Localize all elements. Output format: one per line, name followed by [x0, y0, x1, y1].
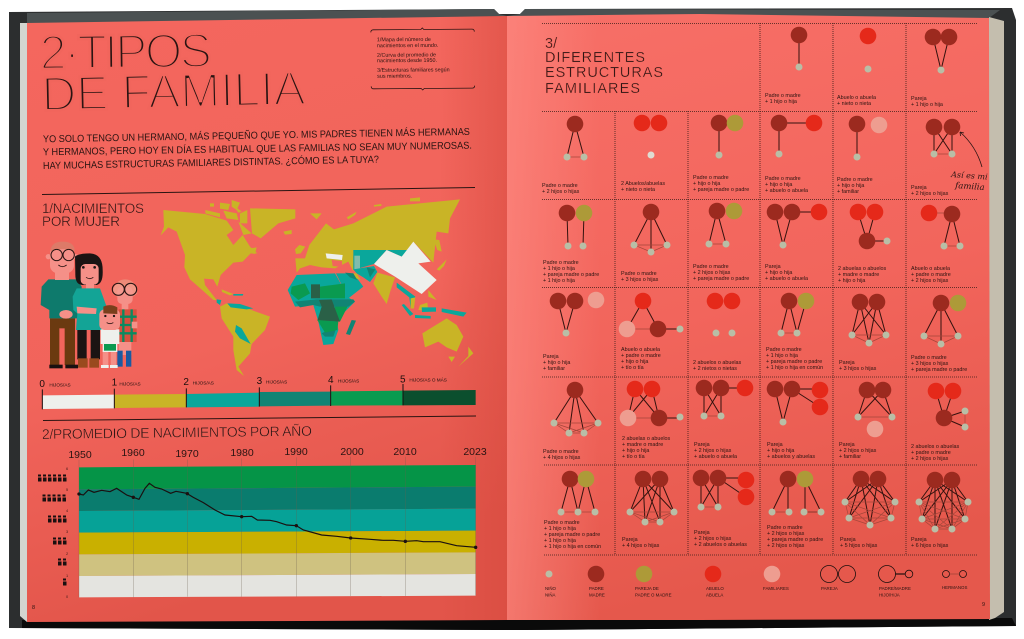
heading: promedio de nacimientos por ano: 2/PROMEDIO DE NACIMIENTOS POR AÑO [42, 423, 312, 442]
row 5 cell 6 [911, 472, 972, 549]
dotted grid [542, 23, 978, 555]
row 3 cell 5: Pareja [839, 360, 855, 366]
row 2 cell 3 [693, 203, 749, 282]
chart y axis with figures: 1 [66, 574, 68, 578]
row 2 cell 3: + 2 hijos o hijas [693, 270, 731, 276]
legend: family structure key: HERMANOS [942, 585, 967, 590]
madagascar [346, 320, 356, 335]
row 4 cell 2: 2 abuelas o abuelos [622, 436, 670, 442]
page number right: 9 [982, 602, 985, 608]
line chart [77, 457, 477, 597]
row 1 cell 2 [621, 115, 667, 193]
arabia [336, 273, 363, 298]
greenland [250, 208, 295, 238]
chart y axis with figures: 0 [66, 595, 68, 599]
contents box: 2/Curva del promedio de [377, 52, 436, 59]
world map [161, 197, 473, 376]
row 4 cell 2: + tío o tía [622, 454, 645, 460]
contents box: nacimientos en el mundo. [377, 43, 438, 49]
row 3 cell 4: Padre o madre [766, 347, 802, 353]
row 4 cell 2: + madre o madre [622, 442, 663, 448]
row 5 cell 2: + 4 hijos o hijas [622, 543, 660, 549]
row 3 cell 2: + hijo o hija [621, 359, 648, 365]
row 3 cell 5 [839, 294, 890, 372]
row 0 cell 5: Abuelo o abuela [837, 95, 876, 101]
chart y axis with figures: 3 [66, 530, 68, 534]
heading: diferentes estructuras familiares: DIFERENTES [545, 50, 645, 66]
illustration: family [41, 242, 137, 368]
row 4 cell 6: 2 abuelos o abuelas [911, 444, 959, 450]
chart y axis with figures: 2 [66, 552, 68, 556]
row 2 cell 3: Padre o madre [693, 264, 729, 270]
row 1 cell 4: + hijo o hija [765, 182, 792, 188]
legend: hijos per mujer: HIJOS/AS [338, 378, 359, 383]
row 3 cell 4: + 1 hijo o hija [766, 353, 798, 359]
row 5 cell 4 [767, 471, 824, 549]
legend: family structure key: PADRE/MADRE [879, 586, 911, 591]
heading: diferentes estructuras familiares [545, 36, 663, 97]
legend: family structure key: PAREJA [821, 586, 838, 591]
row 2 cell 1: Padre o madre [543, 260, 579, 266]
row 5 cell 1: + 1 hijo o hija en común [544, 544, 601, 550]
row 0 cell 6: Pareja [911, 96, 927, 102]
row 2 cell 5: + madre o madre [838, 272, 879, 278]
heading: diferentes estructuras familiares: ESTRUCTURAS [545, 65, 663, 81]
intro text: HAY MUCHAS ESTRUCTURAS FAMILIARES DISTINTAS. ¿CÓMO ES LA TUYA? [43, 153, 379, 172]
panel: left page [27, 16, 507, 622]
row 4 cell 4 [767, 381, 828, 460]
row 1 cell 1: + 2 hijos o hijas [542, 189, 580, 195]
row 2 cell 6: + padre o madre [911, 272, 951, 278]
legend: hijos per mujer: 0 [39, 379, 45, 390]
mother [73, 253, 106, 368]
india [373, 273, 395, 304]
heading: nacimientos por mujer: 1/NACIMIENTOS [42, 201, 144, 216]
row 5 cell 1: Padre o madre [544, 520, 580, 526]
row 3 cell 6 [911, 295, 967, 373]
row 5 cell 5: + 5 hijos o hijas [840, 543, 878, 549]
row 1 cell 1 [542, 116, 588, 195]
legend: family structure key: PADRE O MADRE [635, 592, 672, 598]
row 3 cell 3: + 2 nietos o nietas [693, 366, 737, 372]
row 5 cell 1: + 1 hijo o hija [544, 538, 576, 544]
legend: family structure key: ABUELA [706, 592, 723, 598]
boy [99, 305, 120, 368]
chart year labels: 2000 [340, 446, 364, 458]
row 0 cell 4 [765, 27, 807, 105]
row 5 cell 1: + pareja madre o padre [544, 532, 600, 538]
row 4 cell 5 [839, 382, 896, 460]
row 1 cell 5: + familiar [837, 189, 859, 195]
north america [161, 210, 257, 300]
row 5 cell 2 [622, 471, 678, 549]
row 2 cell 4: + abuelo o abuela [765, 276, 808, 282]
row 2 cell 2: + 3 hijos o hijas [621, 277, 659, 283]
row 4 cell 2 [620, 381, 684, 460]
row 5 cell 3: + 2 abuelos o abuelas [694, 542, 747, 548]
row 3 cell 1: + hijo o hija [543, 360, 570, 366]
panel: right page [507, 14, 990, 620]
row 3 cell 5: + 3 hijos o hijas [839, 366, 877, 372]
row 1 cell 4: + abuelo o abuela [765, 188, 808, 194]
row 4 cell 6 [911, 383, 968, 462]
row 2 cell 6 [911, 205, 964, 284]
row 4 cell 4: + abuelos y abuelas [767, 454, 815, 460]
row 3 cell 2: Abuelo o abuela [621, 347, 660, 353]
row 2 cell 6: + 2 hijos o hijas [911, 278, 949, 284]
legend: family structure key: PAREJA DE [635, 586, 659, 591]
row 2 cell 1: + 1 hijo o hija [543, 266, 575, 272]
row 2 cell 6: Abuelo o abuela [911, 266, 950, 272]
africa [288, 273, 355, 345]
row 3 cell 4: + pareja madre o padre [766, 359, 822, 365]
legend: family structure key: NIÑA [545, 592, 556, 598]
legend: family structure key: PADRE [589, 586, 604, 591]
legend: hijos per mujer: 4 [328, 375, 334, 386]
china [374, 242, 437, 294]
row 3 cell 2: + tío o tía [621, 365, 644, 371]
row 4 cell 4: + hijo o hija [767, 448, 794, 454]
row 3 cell 4 [766, 293, 823, 371]
legend: family structure key [545, 566, 967, 598]
row 4 cell 1: Padre o madre [543, 449, 579, 455]
row 5 cell 4: + 2 hijos o hijas [767, 543, 805, 549]
chart y axis with figures: 6 [66, 467, 68, 471]
legend: hijos per mujer: HIJOS/AS [193, 381, 214, 386]
chart year labels: 1950 [68, 449, 92, 461]
row 5 cell 5: Pareja [840, 537, 856, 543]
row 0 cell 4: + 1 hijo o hija [765, 99, 797, 105]
row 5 cell 4: + 2 hijos o hijas [767, 531, 805, 537]
row 1 cell 2: + nieto o nieta [621, 187, 655, 193]
legend: hijos per mujer: HIJOS/AS O MÁS [409, 377, 447, 383]
row 1 cell 4 [765, 115, 822, 194]
row 3 cell 1: Pareja [543, 354, 559, 360]
legend: family structure key: NIÑO [545, 586, 556, 591]
row 2 cell 4 [765, 204, 827, 282]
australia and new zealand [422, 318, 473, 367]
chart year labels: 1990 [284, 446, 308, 458]
row 1 cell 6: Pareja [911, 185, 927, 191]
row 5 cell 4: Padre o madre [767, 525, 803, 531]
row 2 cell 1 [543, 205, 599, 284]
row 2 cell 4: Pareja [765, 264, 781, 270]
row 4 cell 2: + hijo o hija [622, 448, 649, 454]
row 5 cell 1: + 1 hijo o hija [544, 526, 576, 532]
row 1 cell 3: + hijo o hija [693, 181, 720, 187]
contents box: sus miembros. [377, 74, 412, 80]
chart year labels: 1980 [230, 447, 254, 459]
legend: hijos per mujer [39, 374, 476, 409]
caribbean [222, 247, 257, 295]
row 4 cell 6: + padre o madre [911, 450, 951, 456]
row 5 cell 3: Pareja [694, 530, 710, 536]
southeast asia [397, 283, 467, 319]
row 1 cell 2: 2 Abuelos/abuelas [621, 181, 665, 187]
title [39, 25, 306, 121]
heading: nacimientos por mujer: POR MUJER [42, 214, 120, 229]
row 4 cell 5: + familiar [839, 454, 861, 460]
row 3 cell 2: + padre o madre [621, 353, 661, 359]
row 1 cell 3 [693, 115, 749, 193]
row 4 cell 3 [694, 380, 753, 460]
row 3 cell 1: + familiar [543, 366, 565, 372]
row 3 cell 2 [619, 293, 684, 371]
row 0 cell 6: + 1 hijo o hija [911, 102, 943, 108]
row 4 cell 1 [543, 382, 602, 461]
row 2 cell 1: + 1 hijo o hija [543, 278, 575, 284]
row 5 cell 2: Pareja [622, 537, 638, 543]
row 1 cell 3: Padre o madre [693, 175, 729, 181]
chart year labels: 2023 [463, 446, 487, 458]
row 4 cell 3: + 2 hijos o hijas [694, 448, 732, 454]
row 1 cell 3: + pareja madre o padre [693, 187, 749, 193]
row 2 cell 3: + pareja madre o padre [693, 276, 749, 282]
chart year labels: 2010 [393, 446, 417, 458]
row 3 cell 6: + 3 hijos o hijas [911, 361, 949, 367]
row 2 cell 5: 2 abuelas o abuelos [838, 266, 886, 272]
row 1 cell 5: Padre o madre [837, 177, 873, 183]
heading: nacimientos por mujer [42, 201, 144, 229]
south america [220, 303, 270, 376]
contents box: 3/Estructuras familiares según [377, 67, 450, 74]
row 2 cell 2: Padre o madre [621, 271, 657, 277]
title: 2·TIPOS [39, 25, 212, 80]
row 3 cell 1 [543, 292, 604, 372]
row 5 cell 5 [840, 471, 898, 549]
row 3 cell 6: Padre o madre [911, 355, 947, 361]
row 4 cell 4: Pareja [767, 442, 783, 448]
row 4 cell 5: + 2 hijos o hijas [839, 448, 877, 454]
row 1 cell 4: Padre o madre [765, 176, 801, 182]
arctic islands [205, 200, 252, 235]
row 5 cell 4: + pareja madre o padre [767, 537, 823, 543]
row 1 cell 5 [837, 116, 887, 195]
intro text [43, 125, 472, 172]
row 0 cell 6 [911, 29, 957, 108]
chart y axis with figures: 5 [66, 488, 68, 492]
chart y axis with figures: 4 [66, 509, 68, 513]
chart y axis with figures [38, 467, 68, 599]
heading: diferentes estructuras familiares: 3/ [545, 36, 558, 52]
row 1 cell 5: + hijo o hija [837, 183, 864, 189]
intro text: Y HERMANOS, PERO HOY EN DÍA ES HABITUAL QUE LAS FAMILIAS NO SEAN MUY NUMEROSAS. [43, 139, 472, 158]
row 2 cell 5: + hijo o hija [838, 278, 865, 284]
row 4 cell 5: Pareja [839, 442, 855, 448]
row 4 cell 6: + 2 hijos o hijas [911, 456, 949, 462]
row 4 cell 3: + abuelo o abuela [694, 454, 737, 460]
handwritten note and arrow: Así es mi [950, 170, 988, 182]
handwritten note and arrow [950, 132, 988, 193]
row 1 cell 1: Padre o madre [542, 183, 578, 189]
legend: family structure key: FAMILIARES [763, 586, 789, 591]
legend: family structure key: MADRE [589, 592, 605, 598]
father [41, 242, 82, 368]
row 3 cell 4: + 1 hijo o hija en común [766, 365, 823, 371]
row 2 cell 1: + pareja madre o padre [543, 272, 599, 278]
row 0 cell 4: Padre o madre [765, 93, 801, 99]
row 3 cell 3: 2 abuelos o abuelas [693, 360, 741, 366]
legend: hijos per mujer: HIJOS/AS [119, 382, 141, 387]
legend: hijos per mujer: HIJOS/AS [266, 379, 287, 384]
row 5 cell 6: Pareja [911, 537, 927, 543]
row 5 cell 6: + 6 hijos o hijas [911, 543, 949, 549]
legend: hijos per mujer: 3 [257, 376, 263, 387]
row 2 cell 5 [838, 204, 890, 284]
heading: diferentes estructuras familiares: FAMILIARES [545, 81, 640, 97]
row 4 cell 3: Pareja [694, 442, 710, 448]
europe and russia [295, 199, 460, 273]
legend: hijos per mujer: HIJOS/AS [49, 383, 71, 388]
legend: hijos per mujer: 1 [112, 378, 118, 389]
row 0 cell 5: + nieto o nieta [837, 101, 871, 107]
row 0 cell 5 [837, 28, 876, 107]
row 3 cell 3 [693, 293, 742, 372]
legend: family structure key: HIJO/HIJA [879, 592, 900, 598]
handwritten note and arrow: familia [954, 181, 985, 193]
legend: hijos per mujer: 2 [183, 377, 189, 388]
row 5 cell 1 [544, 471, 601, 550]
legend: family structure key: ABUELO [706, 586, 724, 591]
title: DE FAMILIA [41, 63, 306, 121]
contents box: 1/Mapa del número de [377, 37, 431, 43]
chart year labels: 1970 [175, 448, 199, 460]
row 3 cell 6: + pareja madre o padre [911, 367, 967, 373]
legend: hijos per mujer: 5 [400, 374, 406, 385]
chart year labels [68, 446, 487, 461]
intro text: YO SOLO TENGO UN HERMANO, MÁS PEQUEÑO QUE YO. MIS PADRES TIENEN MÁS HERMANAS [43, 125, 470, 145]
row 4 cell 1: + 4 hijos o hijas [543, 455, 581, 461]
central asia [353, 250, 412, 270]
row 1 cell 6: + 2 hijos o hijas [911, 191, 949, 197]
row 2 cell 4: + hijo o hija [765, 270, 792, 276]
row 5 cell 3 [693, 470, 754, 548]
row 5 cell 3: + 2 hijos o hijas [694, 536, 732, 542]
row 2 cell 2 [621, 204, 670, 283]
ukraine [326, 253, 343, 260]
chart year labels: 1960 [121, 447, 145, 459]
contents box: nacimientos desde 1950. [377, 58, 437, 64]
page number left: 8 [32, 605, 35, 611]
row 1 cell 6 [911, 119, 960, 197]
contents box [371, 28, 475, 90]
girl [112, 279, 137, 367]
